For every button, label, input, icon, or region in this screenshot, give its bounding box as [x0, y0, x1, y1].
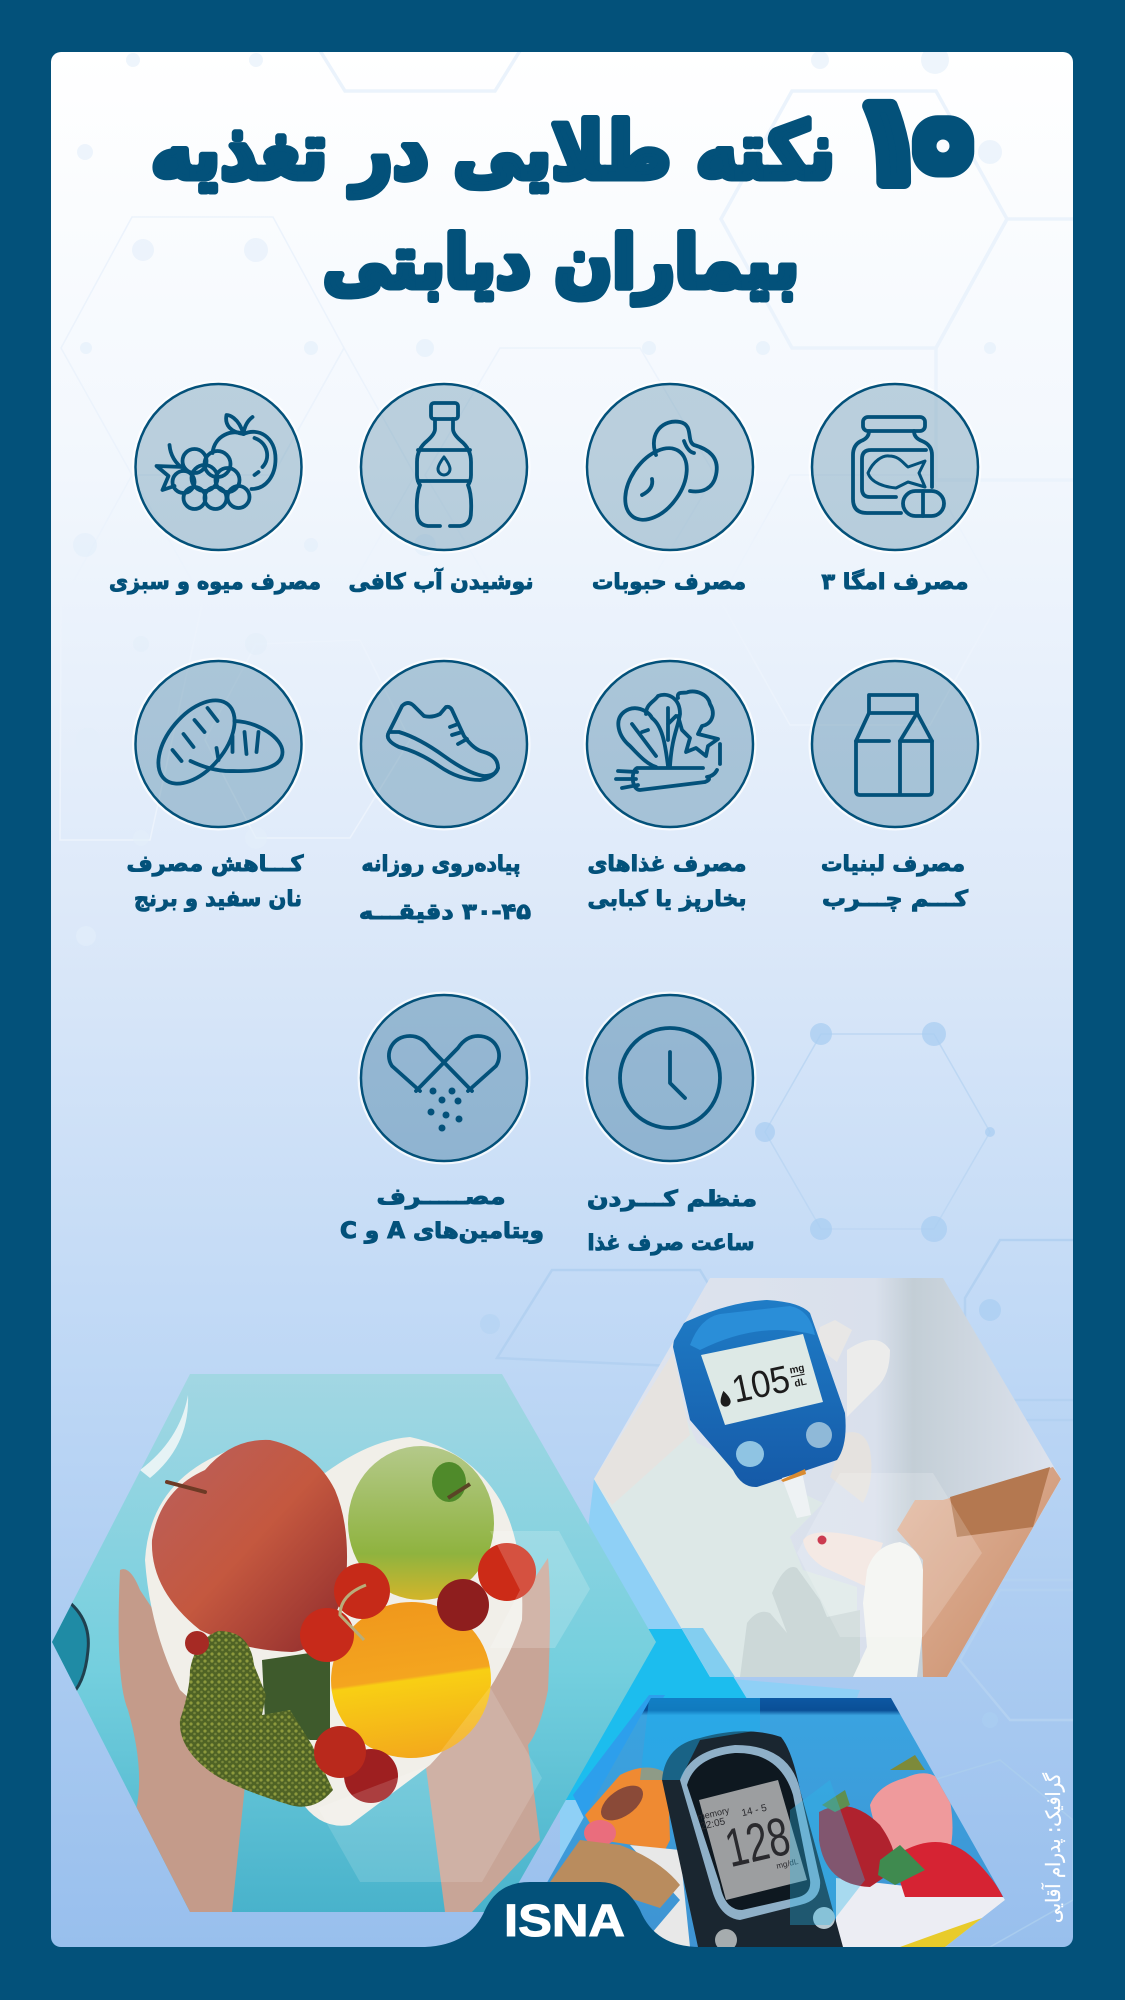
- title: ۰: [925, 108, 961, 178]
- label: [340, 1185, 544, 1244]
- cereal: [548, 1840, 680, 1908]
- icon: beans: [613, 422, 717, 531]
- measuring tape: [900, 1918, 982, 1947]
- white bowl: [145, 1437, 522, 1826]
- label: ۳۰-۴۵ دقیقـــه: [359, 900, 531, 925]
- green apple: [348, 1446, 494, 1600]
- right hand skin: [897, 1467, 1061, 1677]
- meter buttons: [736, 1441, 764, 1467]
- label: مصـــــرف: [376, 1185, 506, 1210]
- blue meter: [673, 1300, 846, 1487]
- label: بخارپز یا کبابی: [588, 887, 746, 912]
- title: [151, 72, 961, 305]
- orange: [331, 1602, 491, 1758]
- icon card: regular meal times: [586, 994, 757, 1256]
- label: [587, 1187, 757, 1256]
- icon card: legumes: [586, 383, 754, 595]
- label: ساعت صرف غذا: [588, 1231, 754, 1256]
- meter reading: 128: [720, 1806, 796, 1879]
- icon: apple and grapes: [156, 415, 276, 509]
- right hand: [425, 1558, 550, 1912]
- title: بیماران دیابتی: [323, 220, 799, 305]
- icon: carrot and greens: [616, 692, 720, 790]
- left hand: [119, 1569, 245, 1912]
- white gloved finger: [853, 1542, 923, 1677]
- photo: glucose meter 128 with fruit and cereal: [540, 1690, 1010, 1951]
- title: ۱: [852, 72, 926, 211]
- photo: fruit bowl in hands: [50, 1370, 660, 1915]
- label: ویتامین‌های A و C: [340, 1219, 544, 1244]
- highlight: cyan hexagon behind photos: [560, 1480, 860, 1859]
- meter screen: [701, 1334, 823, 1425]
- label: [821, 852, 968, 912]
- photo: glucose meter 105 and finger: [590, 1275, 1065, 1690]
- label: کـــم چـــرب: [822, 887, 968, 912]
- label: مصرف حبوبات: [592, 570, 746, 595]
- meter reading: [720, 1366, 807, 1407]
- label: پیاده‌روی روزانه: [362, 852, 520, 877]
- dark finger shading: [950, 1467, 1050, 1537]
- icon: water bottle: [417, 403, 471, 526]
- pattern nodes: [77, 52, 1002, 357]
- label: مصرف میوه و سبزی: [109, 570, 321, 595]
- icon: bread loaves: [144, 686, 282, 798]
- icon card: reduce white bread and rice: [126, 660, 304, 912]
- label: [126, 852, 304, 912]
- meter reading: mg: [789, 1363, 806, 1377]
- pricked finger: [803, 1532, 883, 1587]
- label: نوشیدن آب کافی: [348, 567, 534, 595]
- meter inner black: [687, 1753, 810, 1910]
- meter reading: 14 - 5: [741, 1803, 768, 1819]
- ISNA logo tab: ISNA: [504, 1895, 625, 1946]
- title: نکته طلایی در تغذیه: [151, 107, 835, 197]
- strawberries: [870, 1773, 952, 1850]
- label: مصرف غذاهای: [588, 852, 746, 877]
- meter reading: memory: [696, 1805, 731, 1822]
- icon: fish oil jar: [853, 417, 944, 516]
- gloved hand: [646, 1567, 710, 1677]
- glove wrist shading: [594, 1353, 690, 1505]
- white fruit bowl: [836, 1878, 1010, 1947]
- meter reading: [696, 1793, 800, 1886]
- icon: milk carton: [856, 695, 932, 795]
- meter screen: [699, 1780, 807, 1900]
- graphic credit vertical: گرافیک: پدرام آقایی: [1040, 1773, 1066, 1923]
- dark meter body: [662, 1731, 843, 1947]
- meter reading: 105: [728, 1358, 794, 1412]
- meter buttons: [813, 1907, 835, 1929]
- icon card: omega 3: [811, 383, 979, 595]
- grey lower fingers: [740, 1567, 860, 1677]
- apricots: [585, 1768, 670, 1850]
- label: منظم کـــردن: [587, 1187, 757, 1212]
- red apple: [152, 1440, 347, 1652]
- meter reading: mg/dL: [775, 1857, 800, 1871]
- meter reading: dL: [793, 1377, 808, 1390]
- label: [359, 852, 531, 925]
- icon card: vitamins A and C: [340, 994, 544, 1244]
- tomatoes: [478, 1543, 536, 1601]
- icon card: daily walking: [359, 660, 531, 925]
- test strip: [782, 1472, 811, 1518]
- label: مصرف لبنیات: [821, 852, 965, 877]
- overlay hexes: [818, 1473, 982, 1637]
- meter reading: 22:05: [700, 1816, 727, 1833]
- broccoli stem: [262, 1650, 330, 1740]
- icon card: low-fat dairy: [811, 660, 979, 912]
- icon card: steamed or grilled food: [586, 660, 754, 912]
- ISNA logo tab: [425, 1882, 700, 1947]
- meter bezel: [680, 1745, 820, 1920]
- icon card: fruit and vegetables: [109, 383, 321, 595]
- label: نان سفید و برنج: [134, 887, 302, 912]
- icon card: water: [348, 383, 534, 595]
- overlay hexes: [640, 1690, 760, 1780]
- label: [588, 852, 746, 912]
- icon: open capsules: [389, 1036, 499, 1132]
- overlay hexes: [490, 1531, 590, 1648]
- icon: clock: [620, 1028, 720, 1128]
- glove fingers behind meter: [815, 1320, 852, 1362]
- icon: sneaker: [388, 703, 498, 780]
- label: کـــاهش مصرف: [126, 852, 304, 877]
- broccoli: [180, 1631, 333, 1807]
- label: مصرف امگا ۳: [822, 568, 968, 595]
- white cereal bowl: [630, 1845, 690, 1947]
